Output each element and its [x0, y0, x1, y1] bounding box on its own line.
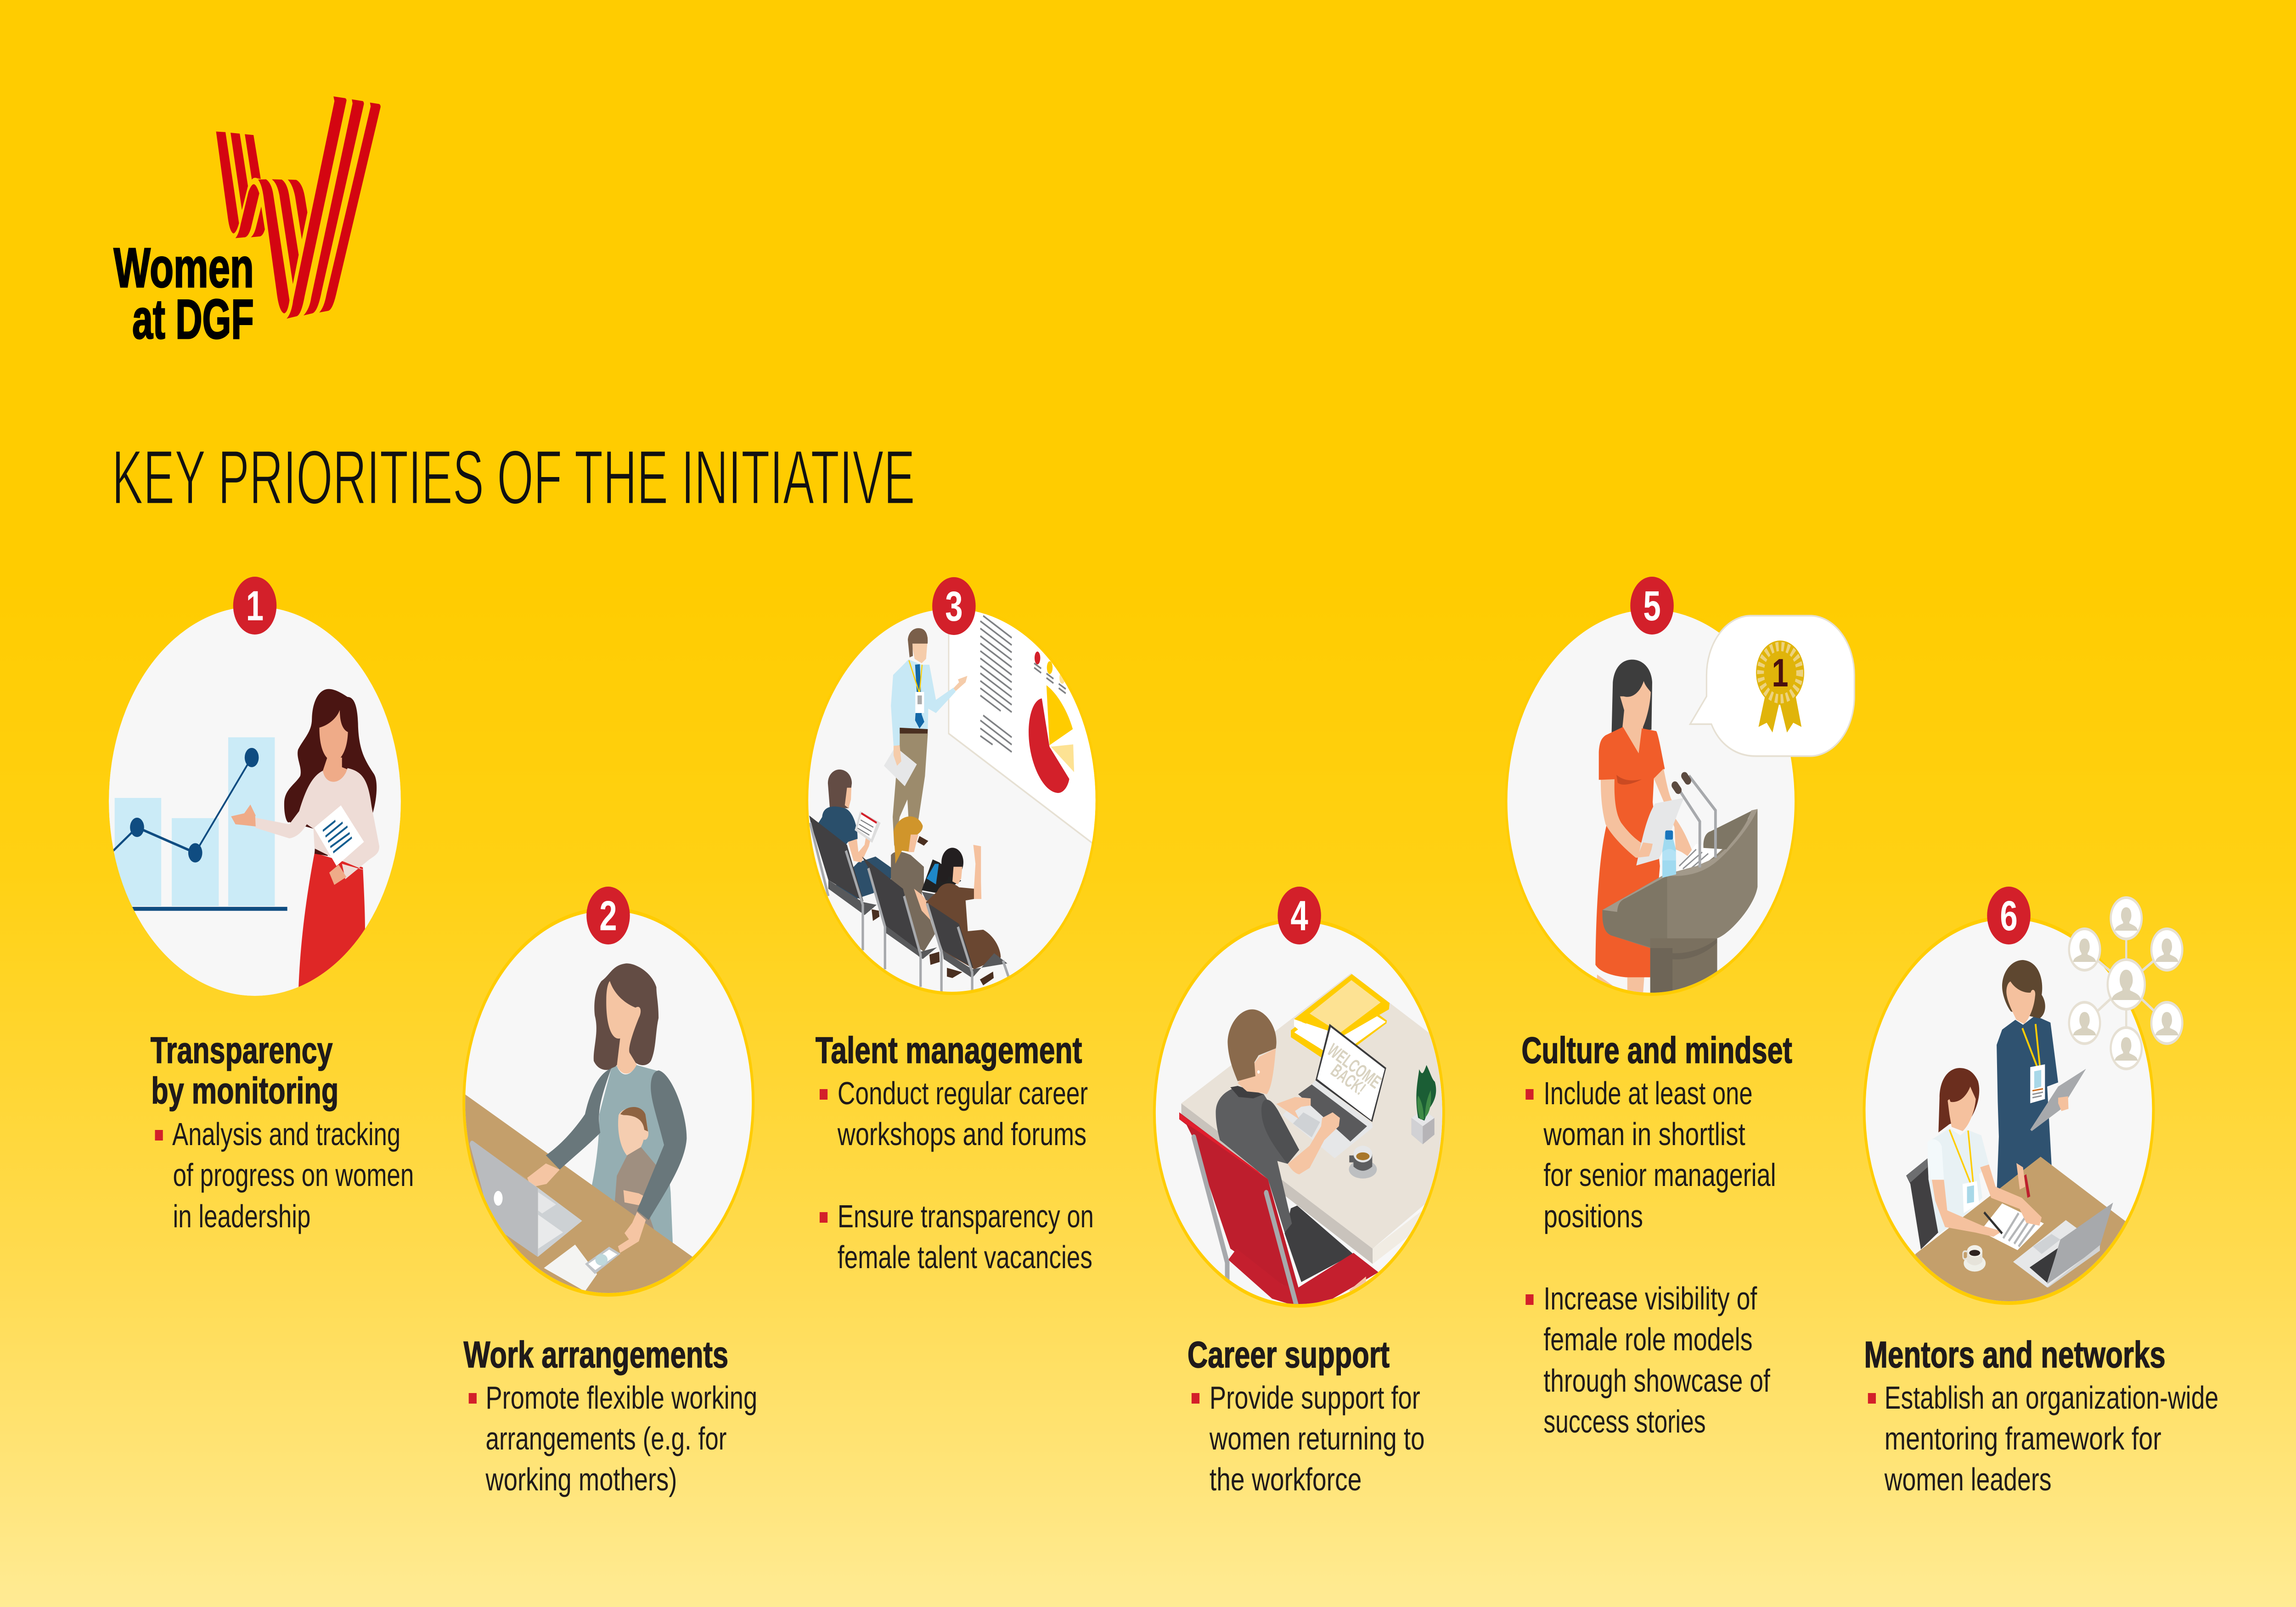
illustration: mentor and mentee at desk: [1863, 916, 2160, 1345]
bullet text: in leadership: [173, 1199, 310, 1235]
panel: 6 mentors and networks: [1863, 887, 2218, 1498]
illustration: speaker at podium: [1505, 607, 1797, 1005]
icon: rosette medal: 1: [1772, 651, 1788, 695]
illustration: woman returning to desk with laptop: WELCOME: [1323, 1040, 1385, 1093]
bullet text: the workforce: [1210, 1462, 1362, 1498]
number badge 4: 4: [1290, 892, 1308, 939]
number badge 1: 1: [246, 582, 264, 629]
number badge 1: [233, 577, 276, 635]
bullet text: for senior managerial: [1543, 1157, 1776, 1193]
icon: rosette medal: [1756, 641, 1804, 732]
number badge 3: 3: [945, 583, 963, 630]
illustration: mother with child at laptop: [462, 909, 755, 1297]
illustration: woman returning to desk with laptop: BACK!: [1327, 1061, 1369, 1099]
bullet text: [1868, 1380, 2218, 1498]
illustration: presentation to seated audience: [806, 603, 1121, 995]
heading: Work arrangements: [463, 1334, 728, 1376]
bullet text: Conduct regular career: [838, 1076, 1088, 1112]
bullet text: through showcase of: [1543, 1363, 1771, 1399]
panel: 2 work arrangements: [448, 887, 757, 1498]
bullet text: arrangements (e.g. for: [485, 1421, 726, 1457]
panel: 1 transparency by monitoring: [108, 577, 414, 1235]
bullet text: Include at least one: [1543, 1076, 1753, 1112]
icon: mentoring network: [2069, 898, 2183, 1069]
panel: 3 talent management: [806, 577, 1121, 1275]
number badge 6: [1987, 887, 2031, 944]
bullet text: female role models: [1543, 1322, 1753, 1358]
illustration: woman returning to desk with laptop: [1153, 920, 1445, 1308]
heading: [151, 1030, 338, 1112]
bullet text: of progress on women: [173, 1157, 414, 1193]
bullet text: workshops and forums: [837, 1117, 1086, 1152]
number badge 4: [1277, 887, 1321, 944]
heading: Talent management: [816, 1030, 1082, 1071]
speech bubble with rosette: [1690, 616, 1854, 756]
logo mark: red ribbon V: [216, 96, 381, 319]
bullet text: Increase visibility of: [1543, 1281, 1757, 1317]
bullet text: success stories: [1543, 1404, 1706, 1440]
bullet text: [469, 1380, 757, 1498]
bullet text: women leaders: [1884, 1462, 2052, 1498]
bullet text: women returning to: [1209, 1421, 1425, 1457]
bullet text: [155, 1117, 414, 1235]
title: KEY PRIORITIES OF THE INITIATIVE: [112, 435, 915, 520]
heading: by monitoring: [151, 1070, 338, 1112]
bullet text: Promote flexible working: [485, 1380, 757, 1416]
bullet text: Analysis and tracking: [172, 1117, 400, 1152]
panel: 5 culture and mindset: [1505, 577, 1854, 1440]
panel: 4 career support: [1153, 887, 1445, 1490]
number badge 2: 2: [599, 892, 617, 939]
bullet text: Provide support for: [1210, 1380, 1420, 1416]
heading: Culture and mindset: [1521, 1030, 1792, 1071]
bullet text: [1525, 1076, 1776, 1440]
bullet text: Establish an organization-wide: [1885, 1380, 2218, 1416]
bullet text: Ensure transparency on: [838, 1199, 1094, 1235]
number badge 5: [1630, 577, 1674, 635]
number badge 2: [586, 887, 630, 944]
logo: Women at DGF: [113, 96, 381, 350]
number badge 6: 6: [2000, 892, 2018, 939]
bullet text: female talent vacancies: [838, 1240, 1092, 1275]
logo wordmark: Women: [113, 236, 254, 299]
bullet text: [1192, 1380, 1425, 1498]
bullet text: working mothers): [485, 1462, 677, 1498]
heading: Transparency: [151, 1030, 333, 1071]
bullet text: mentoring framework for: [1885, 1421, 2161, 1457]
heading: Career support: [1187, 1334, 1390, 1376]
bullet text: woman in shortlist: [1543, 1117, 1745, 1152]
bullet text: [820, 1076, 1094, 1275]
number badge 3: [932, 577, 976, 635]
logo wordmark: [113, 236, 254, 350]
heading: Mentors and networks: [1864, 1334, 2166, 1376]
number badge 5: 5: [1643, 582, 1661, 629]
illustration: presenter with bar chart: [108, 607, 401, 1013]
bullet text: positions: [1543, 1199, 1643, 1235]
logo wordmark: at DGF: [132, 287, 254, 350]
